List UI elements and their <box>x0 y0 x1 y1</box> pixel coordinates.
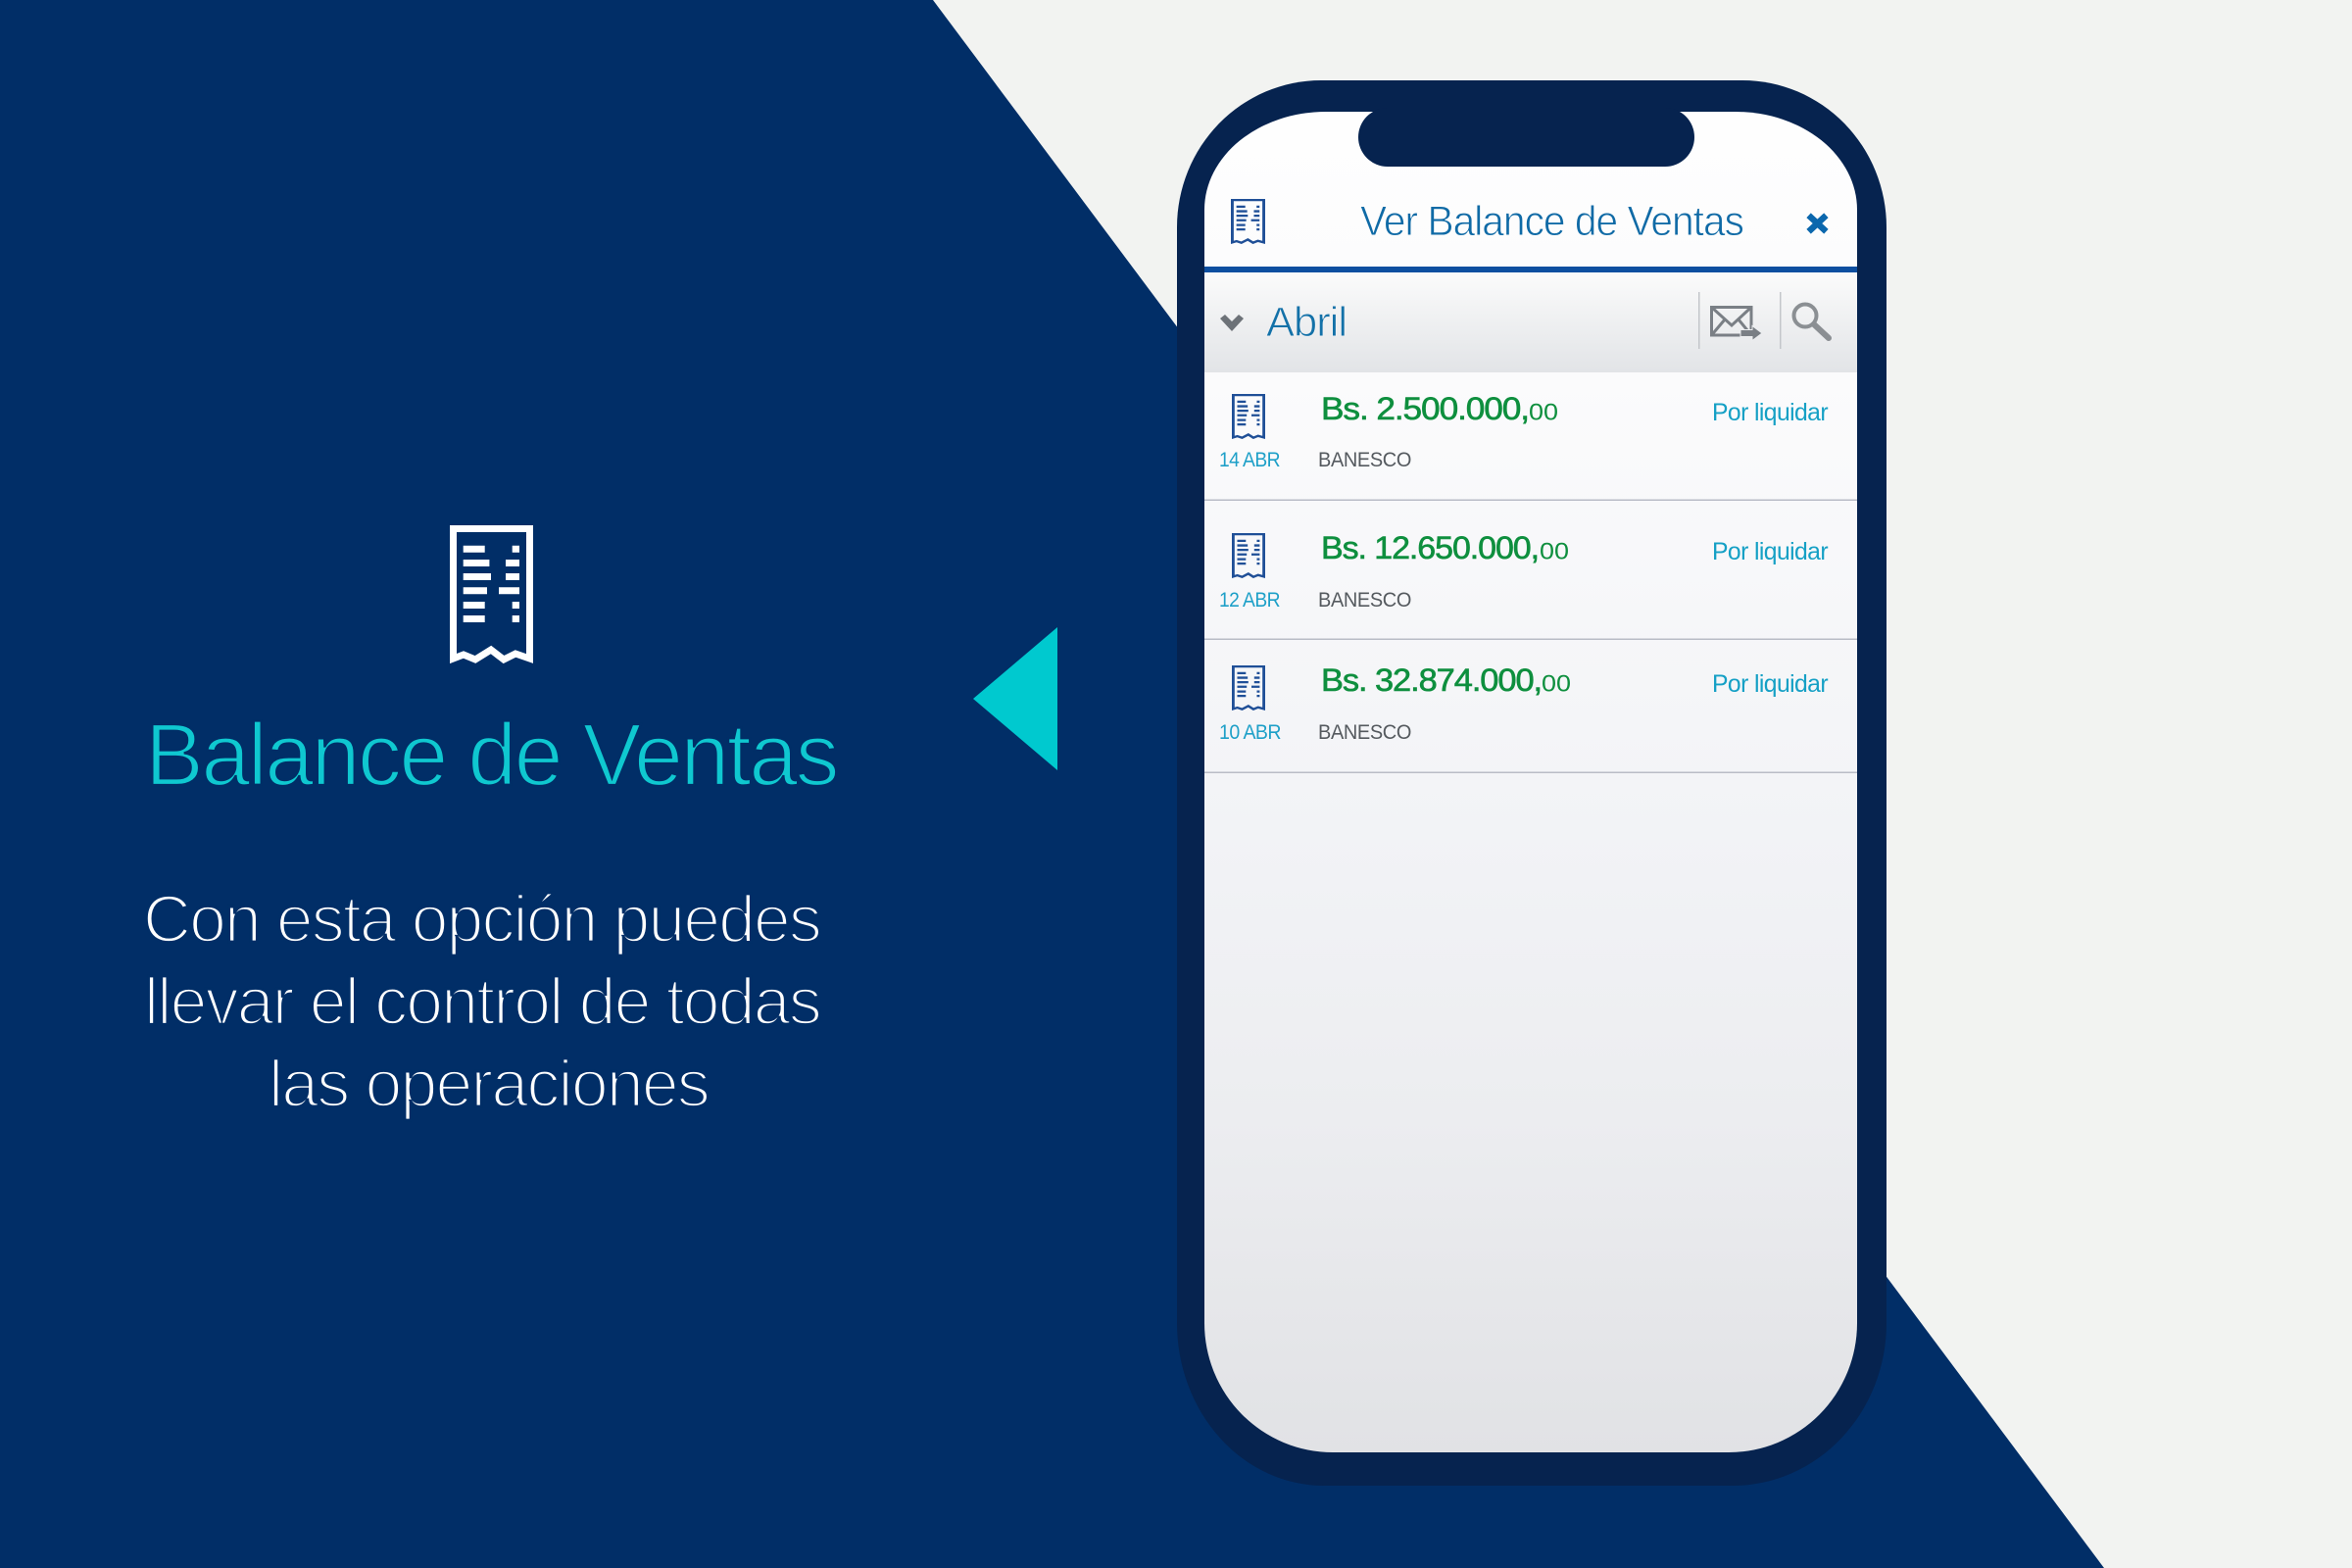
row divider <box>1204 772 1857 773</box>
icon: search <box>1793 304 1829 338</box>
notch <box>1358 108 1694 167</box>
divider right <box>1780 292 1782 349</box>
phone screen <box>1204 112 1857 1452</box>
app header <box>1204 198 1857 272</box>
date: 10 ABR <box>1219 721 1281 744</box>
phone mockup <box>1177 80 1886 1486</box>
transaction row 3 <box>1204 662 1857 773</box>
bank: BANESCO <box>1318 449 1411 471</box>
amount: 00 <box>1540 539 1569 564</box>
row divider <box>1204 639 1857 640</box>
transaction row 1 <box>1204 391 1857 501</box>
text block: description: llevar el control de todas <box>144 964 820 1039</box>
header rule <box>1204 267 1857 272</box>
icon: mail send <box>1711 308 1762 341</box>
status: Por liquidar <box>1712 670 1828 698</box>
transaction row 2 <box>1204 530 1857 640</box>
icon: close <box>1811 218 1824 229</box>
bank: BANESCO <box>1318 589 1411 612</box>
date: 12 ABR <box>1219 589 1280 612</box>
month bar <box>1204 272 1857 372</box>
month bar background <box>1204 272 1857 372</box>
icon: receipt <box>1233 395 1264 438</box>
arrow: teal triangle <box>973 627 1057 770</box>
row divider <box>1204 500 1857 501</box>
bank: BANESCO <box>1318 721 1411 744</box>
status: Por liquidar <box>1712 399 1828 426</box>
month label: Abril <box>1266 299 1347 346</box>
text block: description: las operaciones <box>269 1047 709 1121</box>
amount: 00 <box>1529 400 1558 425</box>
icon: receipt <box>1233 666 1264 710</box>
amount: Bs. 32.874.000, <box>1321 662 1542 698</box>
text block: description <box>143 882 820 1121</box>
text block: description: Con esta opción puedes <box>143 882 820 956</box>
screen title: Ver Balance de Ventas <box>1360 198 1743 245</box>
phone frame <box>1177 80 1886 1486</box>
status: Por liquidar <box>1712 538 1828 565</box>
amount: Bs. 12.650.000, <box>1321 530 1539 565</box>
date: 14 ABR <box>1219 449 1280 471</box>
heading: Balance de Ventas: Balance de Ventas <box>145 707 837 805</box>
icon: receipt small <box>1232 200 1264 243</box>
divider left <box>1698 292 1699 349</box>
amount: 00 <box>1542 670 1571 698</box>
amount: Bs. 2.500.000, <box>1321 391 1529 426</box>
icon: receipt <box>1233 534 1264 577</box>
icon: receipt <box>453 529 529 660</box>
icon: chevron <box>1220 315 1244 331</box>
